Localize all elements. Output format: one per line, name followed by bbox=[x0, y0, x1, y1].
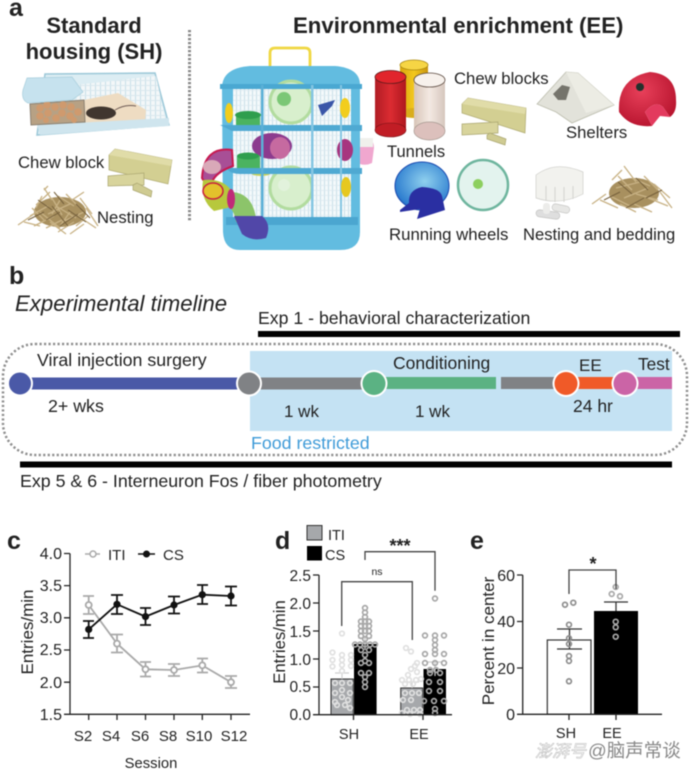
icon: chew blocks bbox=[462, 98, 526, 145]
axes bbox=[517, 575, 662, 720]
watermark bbox=[535, 740, 681, 761]
significance bracket: * bbox=[589, 554, 597, 574]
x axis labels: S6 bbox=[131, 728, 149, 745]
significance brackets bbox=[342, 536, 435, 640]
data points CS bbox=[353, 596, 446, 715]
timeline labels: Test bbox=[638, 354, 670, 374]
icon: EE cage bbox=[202, 48, 374, 250]
timeline labels: 2+ wks bbox=[48, 396, 104, 416]
x axis labels bbox=[339, 727, 429, 743]
timeline labels: Viral injection surgery bbox=[37, 350, 207, 370]
timeline labels bbox=[37, 350, 670, 421]
timeline labels: 24 hr bbox=[573, 396, 613, 416]
y axis title: Entries/min bbox=[270, 600, 289, 684]
series ITI bbox=[83, 596, 237, 688]
text: exp 5 and 6 label: Exp 5 & 6 - Interneuron Fos / fiber photometry bbox=[20, 471, 382, 491]
text: nesting label: Nesting bbox=[97, 208, 154, 227]
y axis labels: 2.5 bbox=[40, 642, 62, 659]
timeline labels: 1 wk bbox=[284, 402, 319, 421]
text: shelters label: Shelters bbox=[566, 123, 627, 142]
icon: nesting cotton bbox=[536, 167, 583, 220]
text: chew block label: Chew block bbox=[18, 153, 105, 172]
error bars bbox=[557, 602, 628, 649]
y axis labels bbox=[497, 568, 515, 724]
significance brackets: ns bbox=[371, 566, 383, 578]
text: food restricted: Food restricted bbox=[251, 433, 370, 453]
y axis labels: 20 bbox=[497, 661, 515, 678]
y axis labels: 3.0 bbox=[40, 610, 62, 627]
legend: ITI bbox=[108, 547, 126, 564]
legend: CS bbox=[325, 548, 345, 564]
y axis labels: 1.5 bbox=[40, 707, 62, 724]
x axis labels: S8 bbox=[159, 728, 177, 745]
heading: environmental enrichment: Environmental enrichment (EE) bbox=[293, 13, 623, 38]
text: chew blocks label: Chew blocks bbox=[454, 69, 549, 88]
x axis labels: S2 bbox=[74, 728, 92, 745]
x axis labels: S12 bbox=[221, 728, 247, 745]
legend bbox=[307, 526, 345, 564]
panel label c: c bbox=[7, 527, 21, 555]
icon: standard cage bbox=[23, 73, 169, 135]
heading: standard housing bbox=[26, 13, 162, 64]
dotted outline bbox=[3, 344, 687, 455]
panel label e: e bbox=[470, 527, 484, 555]
text: running wheels label: Running wheels bbox=[389, 225, 508, 244]
y axis labels: 2.5 bbox=[289, 568, 311, 585]
bars bbox=[547, 611, 638, 714]
y axis labels: 0.0 bbox=[289, 707, 311, 724]
y axis labels: 0.5 bbox=[289, 679, 311, 696]
y axis labels bbox=[40, 546, 62, 724]
text: nesting and bedding label: Nesting and bedding bbox=[523, 225, 675, 244]
food restricted region bbox=[250, 351, 672, 431]
legend: CS bbox=[163, 547, 184, 564]
x axis labels: SH bbox=[556, 726, 576, 742]
panel c: line chart bbox=[7, 527, 250, 771]
timeline track bbox=[8, 371, 672, 396]
significance brackets: *** bbox=[389, 536, 411, 556]
watermark: @脑声常谈 bbox=[588, 740, 681, 761]
heading: experimental timeline: Experimental timeline bbox=[15, 291, 227, 316]
x axis labels: SH bbox=[339, 727, 359, 743]
text: tunnels label: Tunnels bbox=[387, 143, 445, 161]
x axis labels bbox=[74, 728, 247, 745]
timeline labels: 1 wk bbox=[415, 402, 450, 421]
heading: standard housing: housing (SH) bbox=[26, 39, 162, 64]
panel d: bar chart bbox=[270, 526, 452, 743]
y axis labels: 0 bbox=[506, 707, 515, 724]
divider bbox=[188, 30, 191, 222]
panel a: housing conditions bbox=[9, 0, 676, 250]
panel label d: d bbox=[275, 527, 290, 555]
y axis title: Percent in center bbox=[479, 576, 498, 705]
x axis labels: EE bbox=[602, 726, 622, 742]
data points ITI bbox=[330, 631, 423, 716]
x axis labels: S10 bbox=[186, 728, 212, 745]
y axis labels: 3.5 bbox=[40, 578, 62, 595]
y axis labels: 1.0 bbox=[289, 652, 311, 669]
bar: exp 5 and 6 span bbox=[20, 462, 672, 468]
series CS bbox=[83, 585, 237, 638]
panel e: bar chart bbox=[470, 527, 662, 742]
axes bbox=[313, 575, 452, 720]
legend bbox=[85, 547, 184, 564]
bars bbox=[331, 644, 446, 715]
timeline labels: Conditioning bbox=[393, 353, 490, 373]
x axis labels: S4 bbox=[102, 728, 120, 745]
icon: tunnels bbox=[375, 60, 445, 140]
watermark: 澎湃号 bbox=[535, 742, 587, 761]
y axis labels: 1.5 bbox=[289, 624, 311, 641]
y axis labels: 4.0 bbox=[40, 546, 62, 563]
icon: chew block bbox=[108, 149, 172, 197]
icon: running wheels bbox=[395, 160, 508, 219]
error bars bbox=[335, 638, 442, 688]
x axis labels bbox=[556, 726, 622, 742]
panel b: experimental timeline bbox=[3, 262, 687, 491]
timeline labels: EE bbox=[579, 356, 602, 375]
icon: shelters bbox=[537, 72, 676, 126]
y axis labels: 2.0 bbox=[40, 675, 62, 692]
text: exp 1 label: Exp 1 - behavioral characterization bbox=[258, 308, 530, 328]
y axis labels: 60 bbox=[497, 568, 515, 585]
y axis labels: 40 bbox=[497, 614, 515, 631]
y axis labels bbox=[289, 568, 311, 724]
y axis title: Entries/min bbox=[18, 589, 37, 675]
panel label b: b bbox=[9, 262, 24, 290]
y axis labels: 2.0 bbox=[289, 596, 311, 613]
data points SH bbox=[563, 600, 576, 684]
heading: standard housing: Standard bbox=[46, 13, 142, 38]
icon: nesting material bbox=[18, 186, 98, 234]
x axis labels: EE bbox=[409, 727, 429, 743]
significance bracket bbox=[569, 554, 616, 594]
bar: exp 1 span bbox=[258, 331, 680, 337]
axes bbox=[64, 554, 250, 720]
data points EE bbox=[609, 585, 622, 639]
icon: bedding bbox=[592, 166, 672, 212]
legend: ITI bbox=[328, 528, 345, 544]
